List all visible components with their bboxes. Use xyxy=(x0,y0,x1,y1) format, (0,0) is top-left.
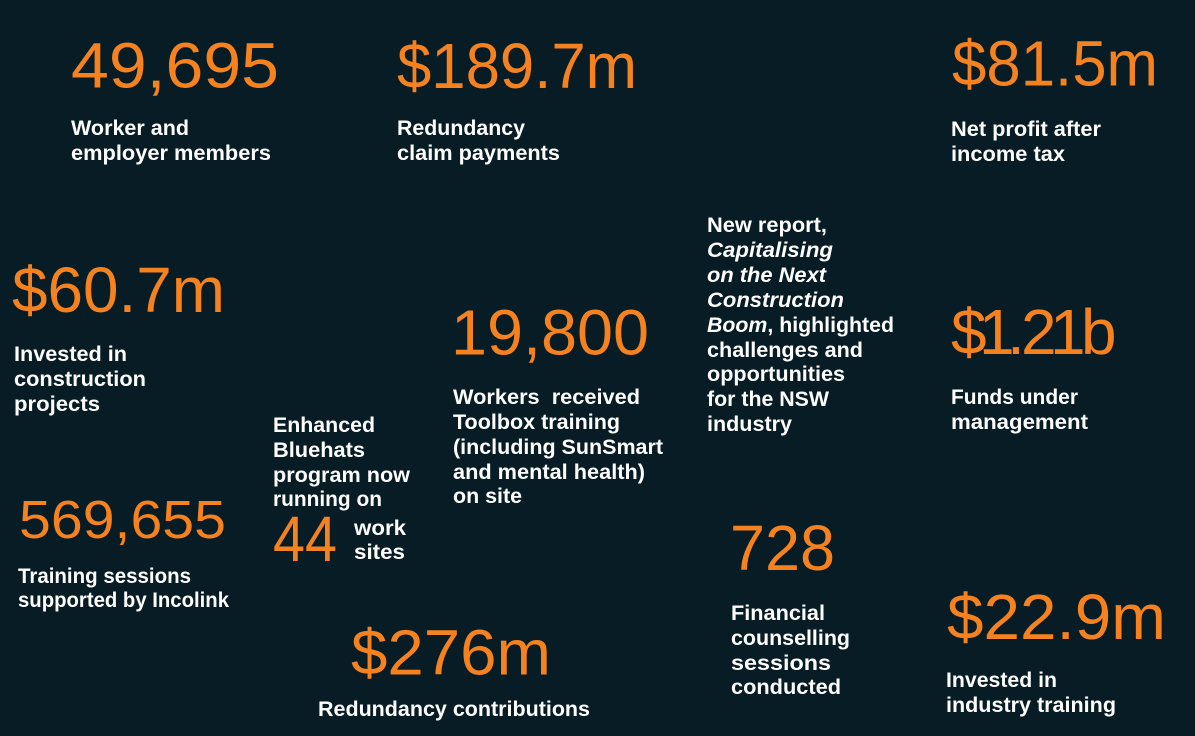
stat: toolbox training: Workers received xyxy=(453,386,640,409)
stat: redundancy contributions: Redundancy contributions xyxy=(318,698,590,721)
stat: worker and employer members: employer members xyxy=(71,142,271,165)
stat: funds under management: management xyxy=(951,411,1088,434)
stat: bluehats program: Bluehats xyxy=(273,439,365,462)
text block: new report: for the NSW xyxy=(707,388,829,411)
text block: new report: New report, xyxy=(707,214,827,237)
stat: toolbox training: and mental health) xyxy=(453,461,645,484)
stat: bluehats program: running on xyxy=(273,488,382,511)
stat: financial counselling: Financial xyxy=(731,602,825,625)
stat: net profit: income tax xyxy=(951,143,1065,166)
stat: funds under management: $1.21b xyxy=(951,296,1117,368)
text block: new report: challenges and xyxy=(707,339,863,362)
text block: new report: on the Next xyxy=(707,264,827,287)
stat: bluehats program xyxy=(273,414,411,575)
text block: new report: Boom, highlighted xyxy=(707,314,894,337)
stat: worker and employer members: 49,695 xyxy=(71,30,279,102)
stat: training sessions: 569,655 xyxy=(19,490,226,550)
stat: net profit: Net profit after xyxy=(951,118,1101,141)
stat: bluehats program: program now xyxy=(273,464,411,487)
stat: financial counselling xyxy=(730,512,850,699)
stat: funds under management: Funds under xyxy=(951,386,1078,409)
stat: funds under management xyxy=(951,296,1117,434)
stat: invested in construction projects: $60.7m xyxy=(12,254,225,326)
stat: redundancy contributions: $276m xyxy=(351,616,551,688)
stat: bluehats program: work xyxy=(353,517,406,540)
stat: toolbox training: (including SunSmart xyxy=(453,436,663,459)
stat: redundancy claim payments: $189.7m xyxy=(397,30,637,102)
text block: new report xyxy=(707,214,894,436)
stat: training sessions: supported by Incolink xyxy=(18,589,229,612)
stat: financial counselling: 728 xyxy=(730,512,835,584)
stat: toolbox training: on site xyxy=(453,485,522,508)
stat: worker and employer members xyxy=(71,30,279,165)
stat: invested in industry training xyxy=(946,581,1166,717)
stat: redundancy contributions xyxy=(318,616,590,721)
stat: bluehats program: sites xyxy=(354,541,405,564)
stat: training sessions xyxy=(18,490,229,612)
text block: new report: opportunities xyxy=(707,363,845,386)
stat: invested in industry training: $22.9m xyxy=(947,581,1166,653)
stat: toolbox training: Toolbox training xyxy=(453,411,620,434)
stat: financial counselling: counselling xyxy=(731,627,850,650)
stat: bluehats program: Enhanced xyxy=(273,414,375,437)
stat: financial counselling: conducted xyxy=(731,676,841,699)
stat: invested in industry training: Invested in xyxy=(946,669,1057,692)
stat: worker and employer members: Worker and xyxy=(71,117,189,140)
text block: new report: Construction xyxy=(707,289,844,312)
stat: redundancy claim payments: claim payments xyxy=(397,142,560,165)
stat: financial counselling: sessions xyxy=(731,652,831,675)
stat: toolbox training xyxy=(451,296,663,508)
text block: new report: industry xyxy=(707,413,792,436)
stat: invested in construction projects: projects xyxy=(14,393,100,416)
stat: redundancy claim payments xyxy=(397,30,637,165)
stat: invested in construction projects: construction xyxy=(14,368,146,391)
stat: net profit xyxy=(951,28,1158,166)
stat: invested in industry training: industry training xyxy=(946,694,1116,717)
stat: training sessions: Training sessions xyxy=(18,565,191,588)
stat: invested in construction projects xyxy=(12,254,225,416)
stat: net profit: $81.5m xyxy=(952,28,1158,100)
stat: toolbox training: 19,800 xyxy=(451,296,649,368)
stat: bluehats program: 44 xyxy=(273,503,337,575)
stat: redundancy claim payments: Redundancy xyxy=(397,117,525,140)
stat: invested in construction projects: Invested in xyxy=(14,343,127,366)
text block: new report: Capitalising xyxy=(707,239,833,262)
